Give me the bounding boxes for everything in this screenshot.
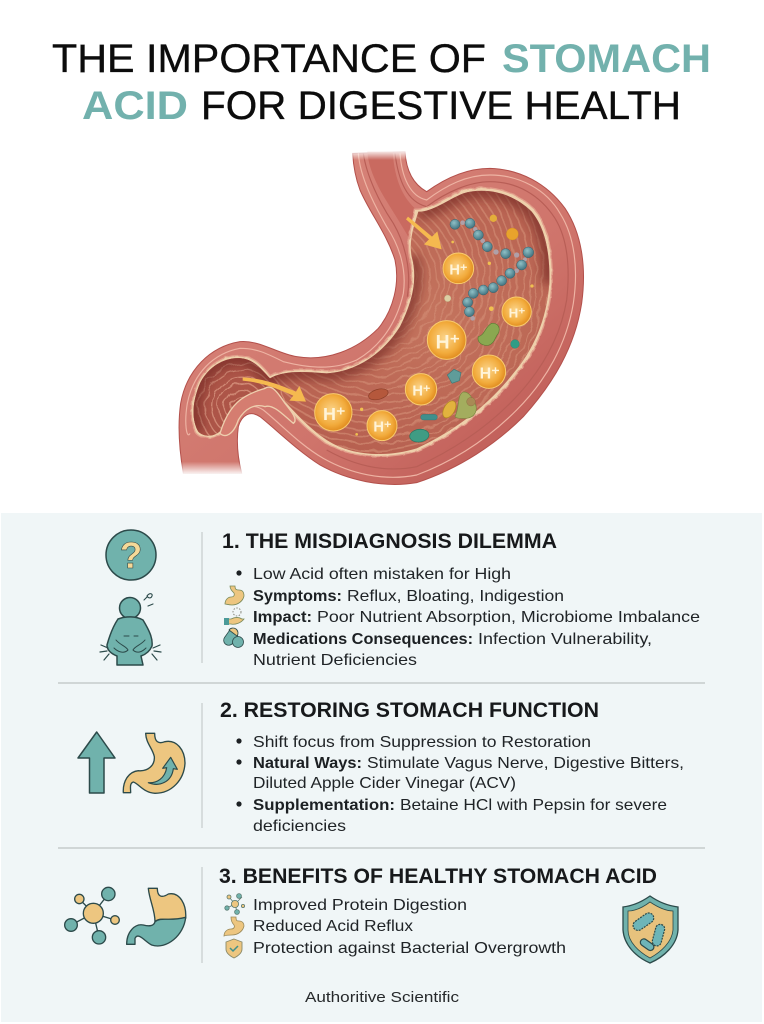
bullet list: Supplementation: [253, 797, 395, 814]
icon: up arrow [78, 732, 115, 793]
H+ ions: H⁺ [412, 383, 431, 399]
title: FOR DIGESTIVE HEALTH [201, 84, 681, 128]
bullet list [236, 734, 684, 835]
stomach inner lining [191, 187, 552, 456]
benefit list [224, 894, 566, 958]
bullet list: Infection Vulnerability, [478, 631, 652, 648]
bullet list: Medications Consequences: [253, 631, 473, 648]
bullet list: Symptoms: [253, 588, 342, 605]
bullet list: Natural Ways: [253, 755, 362, 772]
icon: hand with microbes [224, 608, 244, 625]
bullet list: Betaine HCl with Pepsin for severe [400, 797, 667, 814]
bullet list: Diluted Apple Cider Vinegar (ACV) [253, 775, 516, 792]
benefit list: Protection against Bacterial Overgrowth [253, 940, 566, 957]
icon: shield with bacteria [623, 896, 678, 963]
benefit list: Reduced Acid Reflux [253, 918, 413, 935]
bullet list [222, 566, 700, 669]
illustration: stomach cross-section [178, 151, 584, 485]
arrow: toward pylorus [243, 377, 306, 402]
icon: stomach with acid level [127, 888, 186, 946]
title: ACID [82, 84, 188, 128]
H+ ions: H⁺ [509, 305, 525, 320]
stomach lumen with rugae folds [194, 190, 550, 454]
title: STOMACH [502, 37, 711, 81]
icon: stomach with up arrow [123, 733, 185, 793]
bullet list: Poor Nutrient Absorption, Microbiome Imbalance [317, 609, 700, 626]
footer note: Authoritive Scientific [305, 990, 459, 1006]
icon: molecule [65, 887, 119, 944]
tube ends fading to white [177, 150, 413, 475]
protein chain [450, 218, 534, 321]
icon: stomach [225, 586, 244, 605]
H+ ions [315, 253, 531, 441]
heading: 2. RESTORING STOMACH FUNCTION [220, 699, 599, 722]
bullet list: deficiencies [253, 818, 346, 835]
particles [355, 215, 534, 443]
icon: question mark: ? [120, 535, 142, 576]
section 3: benefits of healthy stomach acid [65, 865, 678, 963]
esophagus channel [367, 152, 417, 253]
title [52, 37, 711, 128]
heading: 3. BENEFITS OF HEALTHY STOMACH ACID [219, 865, 657, 888]
benefit list: Improved Protein Digestion [253, 897, 467, 914]
section 2: restoring stomach function [78, 699, 684, 835]
H+ ions: H⁺ [449, 262, 468, 278]
bullet list: Low Acid often mistaken for High [253, 566, 511, 583]
pyloric fold [220, 387, 295, 435]
icon: small stomach [224, 917, 244, 936]
icon: pills [222, 628, 244, 648]
title: THE IMPORTANCE OF [52, 37, 486, 81]
icon: question mark [106, 530, 156, 580]
section 1: the misdiagnosis dilemma [100, 530, 700, 669]
stomach outer wall [179, 152, 584, 484]
bullet list: Stimulate Vagus Nerve, Digestive Bitters, [367, 755, 684, 772]
heading: 1. THE MISDIAGNOSIS DILEMMA [222, 530, 557, 553]
background panel [1, 513, 762, 1022]
bullet list: Impact: [253, 609, 312, 626]
H+ ions: H⁺ [323, 404, 345, 424]
H+ ions: H⁺ [373, 420, 392, 436]
bullet list: Nutrient Deficiencies [253, 652, 417, 669]
bullet list: Shift focus from Suppression to Restoration [253, 734, 591, 751]
bullet list: Reflux, Bloating, Indigestion [347, 588, 564, 605]
icon: person with stomach pain [100, 594, 161, 665]
arrow: entering stomach [406, 217, 442, 249]
icon: small molecule [225, 894, 245, 914]
H+ ions: H⁺ [436, 332, 460, 353]
muscle layer stripes [186, 153, 575, 477]
icon: small shield [226, 939, 242, 958]
H+ ions: H⁺ [480, 365, 500, 382]
